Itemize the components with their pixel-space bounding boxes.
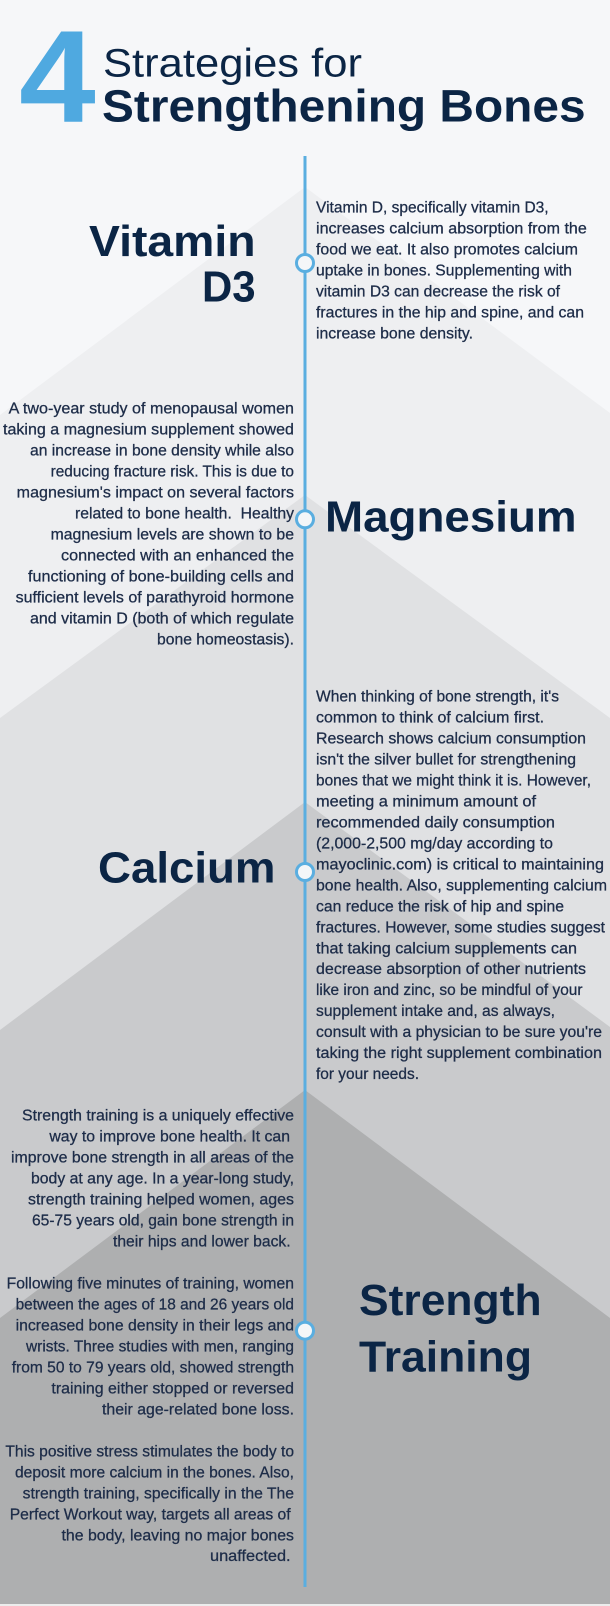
text: strength training paragraph 1: way to improve bone health. It can xyxy=(48,1129,290,1146)
heading: vitamin D3: Vitamin xyxy=(89,217,256,266)
heading: strength training: Training xyxy=(359,1333,532,1382)
text: calcium: taking the right supplement combination xyxy=(316,1045,602,1062)
text: calcium: bone health. Also, supplementing calcium xyxy=(316,877,607,894)
text: vitamin D3: fractures in the hip and spine, and can xyxy=(316,304,584,321)
text: calcium xyxy=(316,689,607,1083)
text: strength training paragraph 3 xyxy=(5,1443,294,1565)
heading: vitamin D3: D3 xyxy=(202,263,256,312)
text: calcium: (2,000-2,500 mg/day according to xyxy=(316,835,553,852)
text: calcium: can reduce the risk of hip and spine xyxy=(316,898,564,915)
text: strength training paragraph 2: wrists. Three studies with men, ranging xyxy=(25,1338,294,1355)
section: magnesium xyxy=(3,400,577,648)
text: strength training paragraph 1: their hips and lower back. xyxy=(113,1234,291,1251)
heading: magnesium: Magnesium xyxy=(325,493,577,542)
text: calcium: recommended daily consumption xyxy=(316,814,555,832)
timeline marker 3 xyxy=(296,864,314,880)
text: vitamin D3: vitamin D3 can decrease the risk of xyxy=(316,283,561,300)
timeline marker 4 xyxy=(296,1322,314,1339)
text: strength training paragraph 3: This positive stress stimulates the body to xyxy=(5,1443,294,1460)
text: magnesium: magnesium's impact on several factors xyxy=(17,484,294,502)
text: strength training paragraph 2: training either stopped or reversed xyxy=(51,1380,294,1397)
text: calcium: Research shows calcium consumption xyxy=(316,731,586,748)
text: magnesium: bone homeostasis). xyxy=(157,632,294,648)
text: calcium: isn't the silver bullet for strengthening xyxy=(316,752,576,769)
text: vitamin D3: uptake in bones. Supplementing with xyxy=(316,262,572,279)
text: vitamin D3 xyxy=(316,199,587,342)
text: vitamin D3: increases calcium absorption from the xyxy=(316,220,587,237)
big number 4: 4 xyxy=(19,3,96,150)
text: calcium: bones that we might think it is. However, xyxy=(316,772,591,790)
text: magnesium: functioning of bone-building cells and xyxy=(28,568,294,586)
text: magnesium: reducing fracture risk. This is due to xyxy=(51,464,294,480)
heading: strength training xyxy=(359,1276,542,1382)
text: vitamin D3: increase bone density. xyxy=(316,325,473,342)
text: strength training paragraph 2: increased bone density in their legs and xyxy=(16,1317,294,1334)
text: calcium: for your needs. xyxy=(316,1066,419,1083)
timeline marker 2 xyxy=(296,511,314,528)
text: strength training paragraph 3: strength training, specifically in the The xyxy=(23,1485,294,1502)
text: calcium: fractures. However, some studies suggest xyxy=(316,919,606,936)
heading: strength training: Strength xyxy=(359,1276,542,1325)
text: calcium: that taking calcium supplements can xyxy=(316,940,577,957)
text: strength training paragraph 3: unaffected. xyxy=(210,1548,291,1565)
text: magnesium: an increase in bone density while also xyxy=(30,442,294,460)
text: magnesium xyxy=(3,400,294,648)
title line 2: Strengthening Bones xyxy=(102,81,586,132)
section: calcium xyxy=(98,689,607,1083)
text: strength training paragraph 2: from 50 to 79 years old, showed strength xyxy=(12,1359,294,1376)
text: magnesium: and vitamin D (both of which regulate xyxy=(30,610,294,628)
text: strength training paragraph 3: the body, leaving no major bones xyxy=(62,1527,294,1544)
text: calcium: like iron and zinc, so be mindful of your xyxy=(316,982,583,999)
title xyxy=(19,3,586,150)
text: strength training paragraph 1: Strength training is a uniquely effective xyxy=(22,1108,294,1125)
text: strength training paragraph 3: Perfect Workout way, targets all areas of xyxy=(10,1506,291,1523)
text: magnesium: A two-year study of menopausal women xyxy=(9,400,294,418)
text: magnesium: taking a magnesium supplement showed xyxy=(3,422,294,438)
text: calcium: When thinking of bone strength, it's xyxy=(316,689,559,706)
text: strength training paragraph 2: Following five minutes of training, women xyxy=(7,1275,294,1292)
text: calcium: decrease absorption of other nutrients xyxy=(316,961,586,978)
text: calcium: meeting a minimum amount of xyxy=(316,794,537,810)
text: magnesium: related to bone health. Healthy xyxy=(75,506,294,522)
section: strength training xyxy=(5,1108,542,1565)
text: magnesium: sufficient levels of parathyroid hormone xyxy=(16,590,294,606)
text: vitamin D3: Vitamin D, specifically vitamin D3, xyxy=(316,199,549,216)
text: strength training paragraph 3: deposit more calcium in the bones. Also, xyxy=(15,1464,294,1481)
title line 1: Strategies for xyxy=(103,42,362,86)
heading: vitamin D3 xyxy=(89,217,256,312)
text: strength training paragraph 2: between the ages of 18 and 26 years old xyxy=(16,1296,294,1313)
text: calcium: consult with a physician to be sure you're xyxy=(316,1024,602,1041)
timeline marker 1 xyxy=(296,254,314,272)
text: strength training paragraph 2: their age-related bone loss. xyxy=(102,1401,294,1418)
text: strength training paragraph 2 xyxy=(7,1275,294,1418)
text: calcium: common to think of calcium first. xyxy=(316,710,544,727)
section: vitamin D3 xyxy=(89,199,587,342)
text: magnesium: magnesium levels are shown to be xyxy=(51,526,294,544)
text: strength training paragraph 1: strength training helped women, ages xyxy=(28,1192,294,1209)
text: vitamin D3: food we eat. It also promotes calcium xyxy=(316,241,578,258)
timeline line xyxy=(304,156,306,1587)
text: strength training paragraph 1: improve bone strength in all areas of the xyxy=(11,1150,294,1167)
text: calcium: mayoclinic.com) is critical to maintaining xyxy=(316,856,604,873)
text: magnesium: connected with an enhanced the xyxy=(61,548,294,564)
text: calcium: supplement intake and, as always, xyxy=(316,1003,555,1020)
heading: calcium: Calcium xyxy=(98,844,276,893)
text: strength training paragraph 1 xyxy=(11,1108,294,1251)
text: strength training paragraph 1: 65-75 years old, gain bone strength in xyxy=(32,1213,294,1230)
text: strength training paragraph 1: body at any age. In a year-long study, xyxy=(31,1171,294,1188)
